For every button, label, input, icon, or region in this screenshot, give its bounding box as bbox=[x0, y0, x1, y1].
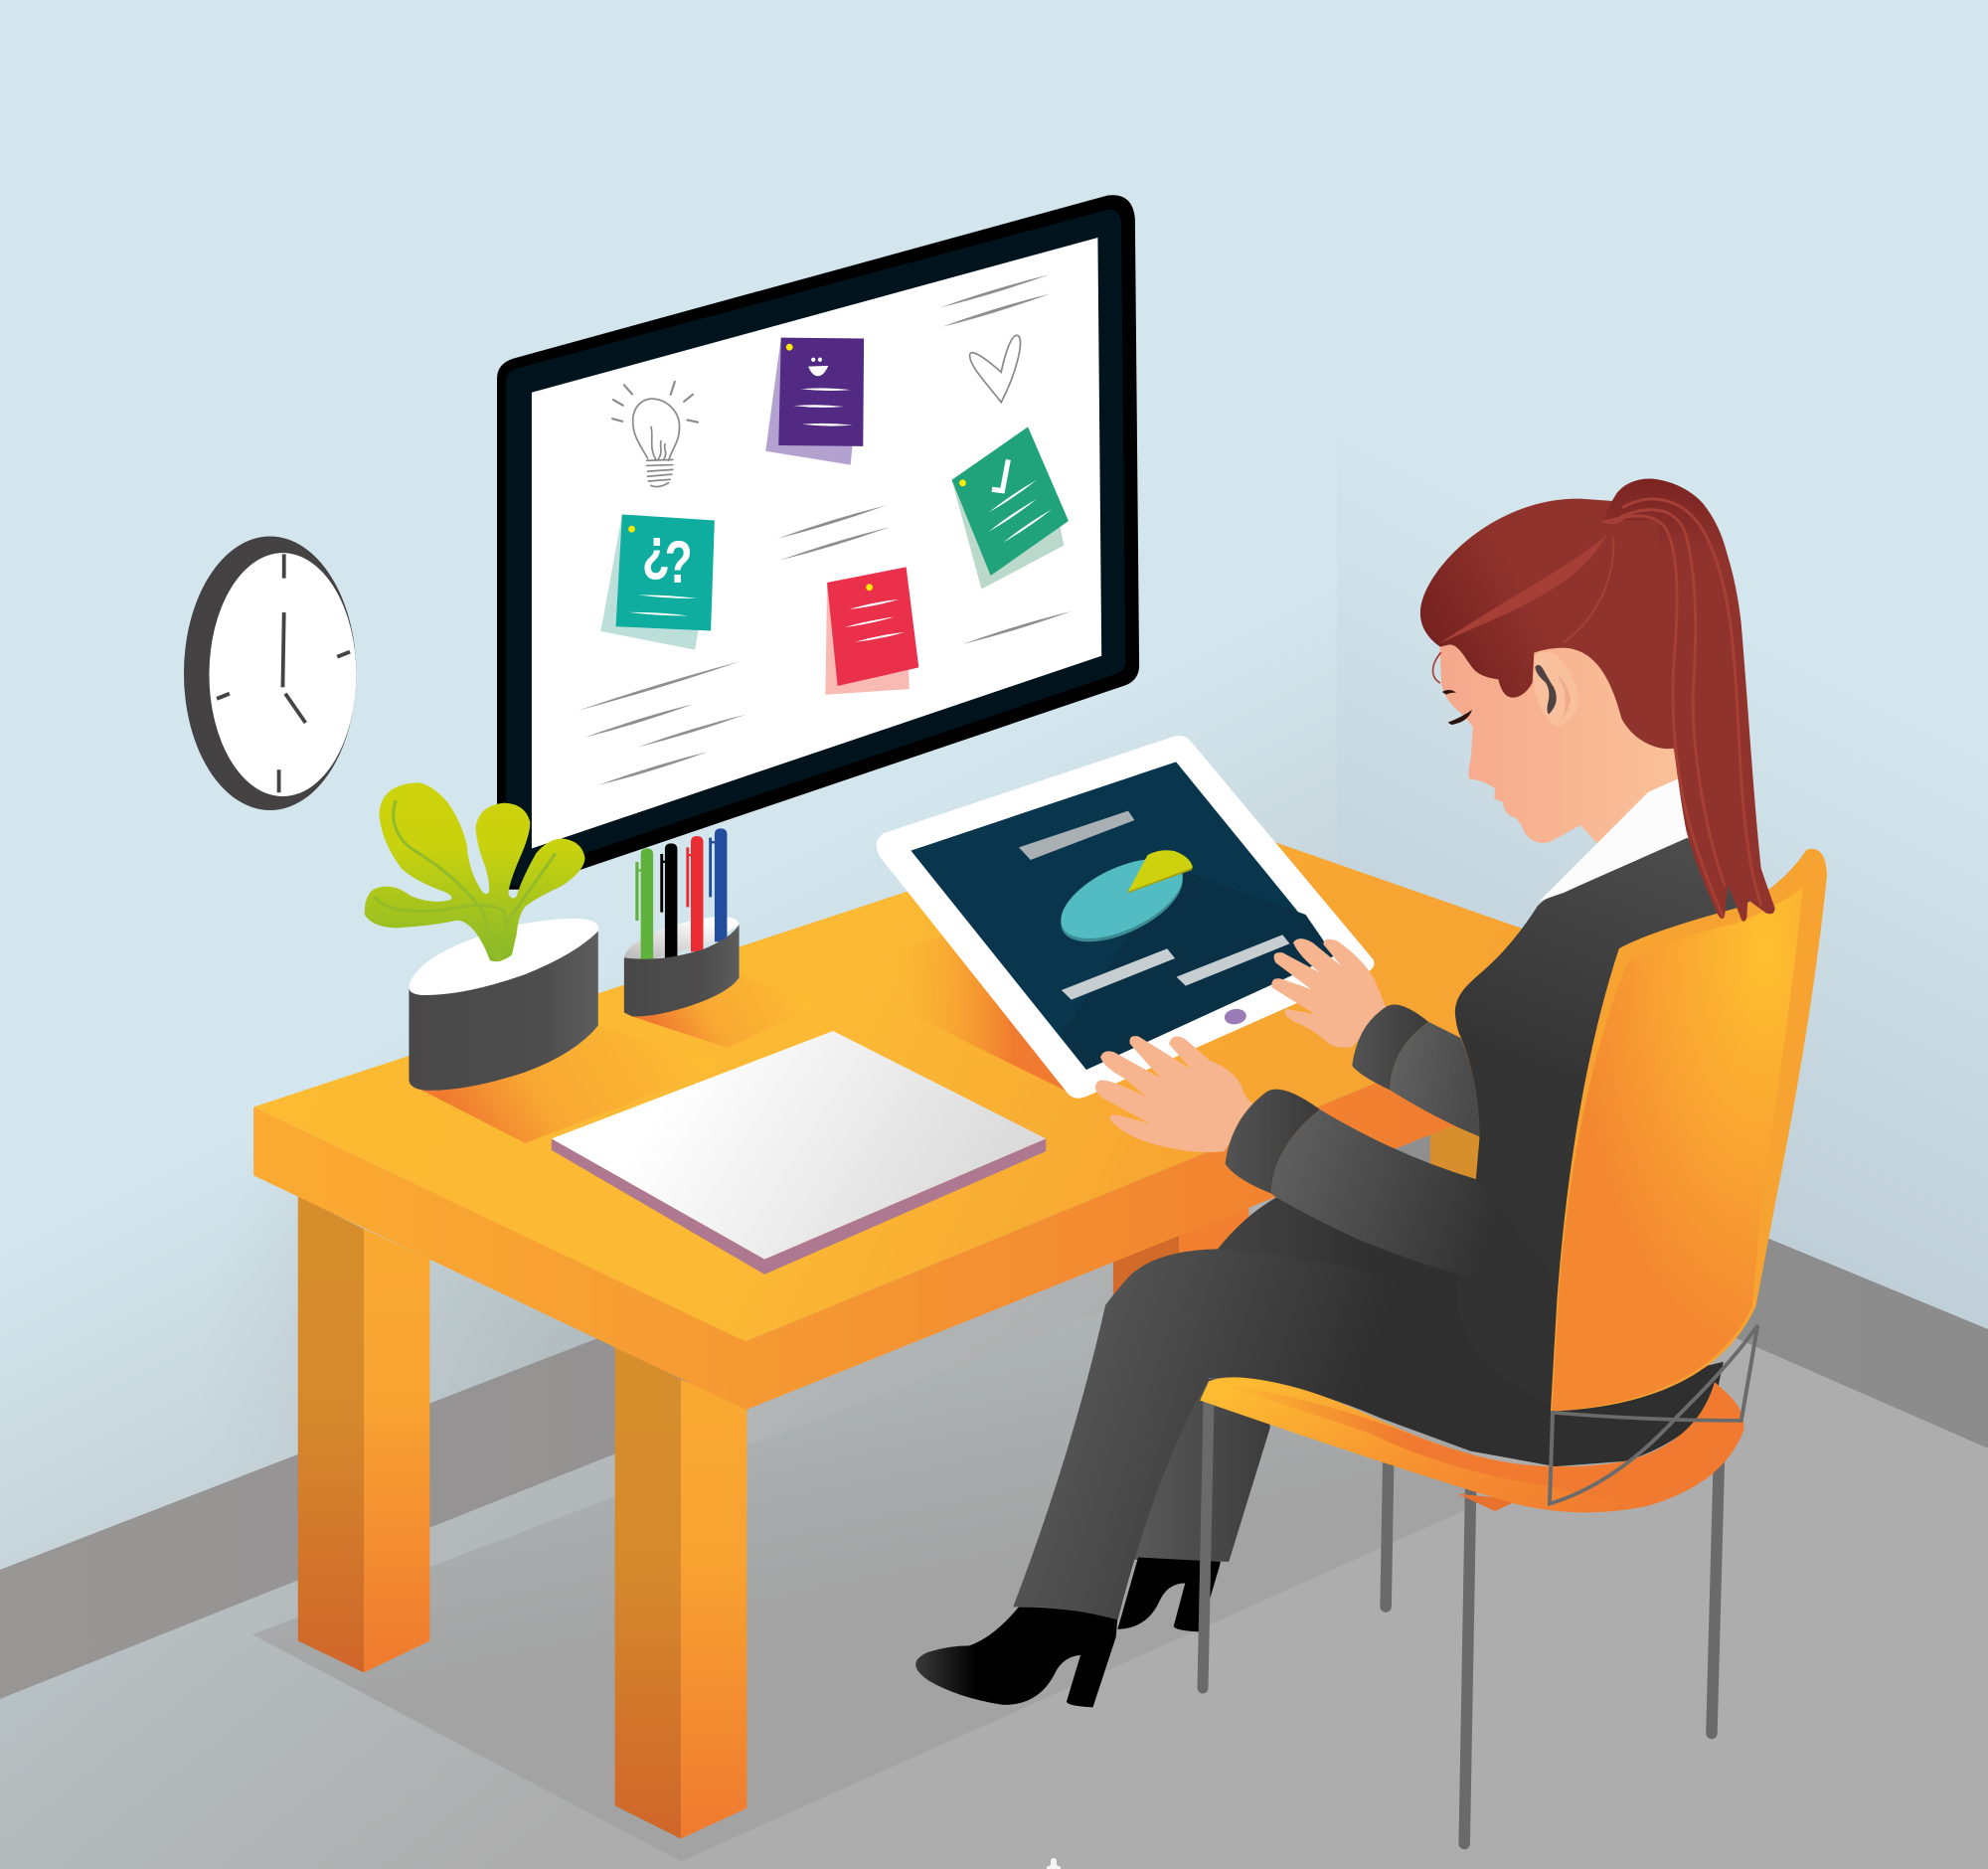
sticky note: red bbox=[825, 567, 918, 695]
chair back panel bbox=[1552, 888, 1803, 1412]
desk right back leg bbox=[1430, 1104, 1483, 1186]
baseboard bbox=[0, 1051, 1988, 1699]
screen shadow bbox=[1061, 872, 1334, 1070]
sticky note: teal question marks: ¿ bbox=[642, 515, 670, 583]
woman head bbox=[1420, 479, 1775, 922]
chair bbox=[1200, 849, 1827, 1512]
chair front left leg bbox=[1203, 1402, 1209, 1688]
seat front bbox=[1200, 1377, 1743, 1512]
screen text bar right bbox=[1177, 934, 1289, 986]
sticky note: teal question marks bbox=[600, 514, 715, 650]
tablet shadow on desk bbox=[887, 935, 1068, 1092]
small mark bbox=[1047, 1858, 1061, 1869]
tablet button bbox=[1223, 1007, 1247, 1026]
icon: light bulb bbox=[612, 382, 698, 487]
pen holder inside bbox=[624, 917, 740, 962]
woman legs, torso and arms bbox=[1013, 836, 1750, 1619]
desk front leg bbox=[615, 1344, 746, 1838]
desk bbox=[253, 805, 1522, 1838]
hair bbox=[1420, 479, 1775, 922]
ponytail top bbox=[1603, 479, 1728, 557]
hand: right bbox=[1271, 938, 1388, 1048]
pen holder shadow bbox=[632, 974, 820, 1048]
hand: left bbox=[1095, 1036, 1256, 1152]
desk top bbox=[253, 805, 1522, 1341]
upper thigh bbox=[1218, 1197, 1475, 1296]
tablet screen bbox=[911, 762, 1334, 1070]
back leg bbox=[1121, 1378, 1270, 1562]
tablet body bbox=[877, 736, 1375, 1099]
monitor outer frame bbox=[497, 195, 1139, 890]
pen holder body bbox=[624, 925, 740, 1016]
plant veins bbox=[375, 800, 556, 961]
pie chart bbox=[1048, 842, 1196, 958]
chair back rim bbox=[1551, 849, 1827, 1412]
desk left face bbox=[253, 1107, 746, 1410]
tablet bbox=[877, 736, 1388, 1152]
chair back bbox=[1551, 849, 1827, 1412]
desk left leg bbox=[298, 1196, 429, 1672]
seat tip bbox=[1457, 1493, 1520, 1511]
chair frame bbox=[1550, 1325, 1757, 1504]
plant leaves bbox=[365, 782, 585, 961]
icon: wall clock bbox=[184, 537, 356, 810]
sticky note: purple bbox=[765, 338, 864, 465]
earring bbox=[1535, 665, 1557, 714]
hair highlights bbox=[1433, 499, 1761, 917]
floor bbox=[0, 1165, 1988, 1869]
shoe: front bbox=[915, 1607, 1117, 1707]
pen holder and plant bbox=[365, 782, 740, 1091]
far sleeve bbox=[1352, 1005, 1479, 1136]
torso jacket bbox=[1455, 836, 1750, 1407]
desk right face bbox=[746, 1023, 1522, 1410]
shoe: back bbox=[1117, 1557, 1221, 1632]
trousers bbox=[1013, 1249, 1724, 1619]
monitor screen bbox=[532, 238, 1101, 849]
seat top bbox=[1222, 1382, 1743, 1506]
screen title bar bbox=[1019, 811, 1134, 860]
plant pot shadow bbox=[409, 1026, 728, 1143]
screen text bar left bbox=[1062, 948, 1175, 1000]
chair rear legs bbox=[1386, 1451, 1720, 1844]
ear bbox=[1534, 652, 1578, 726]
eyelash bbox=[1448, 710, 1472, 725]
desk back leg bbox=[1113, 1186, 1248, 1344]
scribble lines bbox=[578, 274, 1071, 785]
ear inner bbox=[1558, 674, 1571, 719]
sticky note: teal question marks: ? bbox=[665, 529, 693, 595]
plant pot body bbox=[409, 928, 598, 1091]
near sleeve bbox=[1226, 1090, 1564, 1291]
collar bbox=[1539, 778, 1690, 902]
paper block bbox=[552, 1031, 1046, 1274]
monitor foot bbox=[504, 850, 534, 888]
face and neck bbox=[1439, 643, 1678, 843]
sticky note: green checklist bbox=[952, 426, 1069, 589]
monitor bbox=[497, 195, 1139, 890]
chair seat bbox=[1200, 1325, 1757, 1512]
icon: heart bbox=[970, 335, 1020, 403]
desk shadows of pot and pen holder bbox=[409, 974, 820, 1143]
desk floor shadow bbox=[252, 1224, 1471, 1861]
monitor bezel bbox=[506, 210, 1125, 879]
pens bbox=[635, 828, 727, 961]
eyebrow bbox=[1442, 690, 1456, 695]
woman back leg and shoes bbox=[915, 1378, 1270, 1707]
plant pot soil top bbox=[409, 919, 598, 995]
